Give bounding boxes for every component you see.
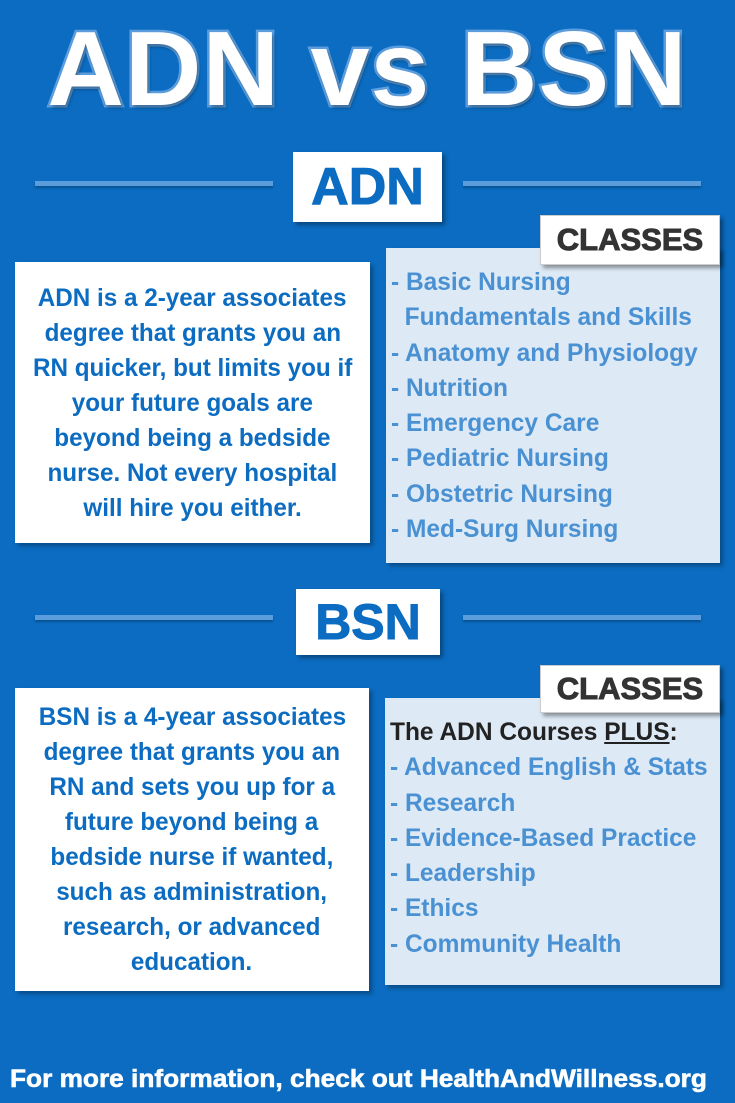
panel: BSN description: such as administration, bbox=[57, 878, 327, 906]
panel: ADN description: your future goals are bbox=[72, 389, 313, 417]
panel: BSN classes: - Community Health bbox=[390, 930, 621, 958]
panel: BSN classes: - Research bbox=[390, 789, 515, 817]
footer: For more information, check out HealthAndWillness.org bbox=[10, 1065, 707, 1093]
panel: ADN description: RN quicker, but limits you if bbox=[33, 354, 352, 382]
panel: BSN description: degree that grants you an bbox=[44, 738, 340, 766]
heading: CLASSES (BSN) bbox=[540, 665, 720, 713]
panel: BSN description: bedside nurse if wanted, bbox=[51, 843, 333, 871]
panel: ADN description: will hire you either. bbox=[83, 494, 302, 522]
heading: CLASSES (ADN): CLASSES bbox=[557, 222, 703, 257]
heading: ADN: ADN bbox=[311, 158, 424, 216]
panel: ADN description: beyond being a bedside bbox=[54, 424, 331, 452]
panel: ADN classes: - Obstetric Nursing bbox=[391, 480, 613, 508]
panel: ADN classes: Fundamentals and Skills bbox=[405, 303, 692, 331]
panel: ADN classes bbox=[386, 248, 720, 563]
heading: CLASSES (ADN) bbox=[540, 215, 720, 265]
panel: ADN description: ADN is a 2-year associates bbox=[38, 284, 347, 312]
panel: BSN classes bbox=[385, 698, 720, 985]
panel: BSN description: BSN is a 4-year associates bbox=[38, 703, 346, 731]
panel: BSN description: RN and sets you up for a bbox=[49, 773, 335, 801]
heading: CLASSES (BSN): CLASSES bbox=[557, 671, 703, 706]
panel: BSN classes: - Evidence-Based Practice bbox=[390, 824, 696, 852]
panel: ADN classes: - Pediatric Nursing bbox=[391, 444, 609, 472]
heading: ADN bbox=[293, 152, 442, 222]
panel: ADN description bbox=[15, 262, 370, 543]
panel: BSN description: research, or advanced bbox=[63, 913, 321, 941]
panel: ADN classes: - Nutrition bbox=[391, 374, 508, 402]
panel: ADN description: nurse. Not every hospital bbox=[48, 459, 337, 487]
panel: BSN classes: - Leadership bbox=[390, 859, 536, 887]
heading: BSN: BSN bbox=[315, 594, 421, 650]
panel: ADN classes: - Med-Surg Nursing bbox=[391, 515, 618, 543]
panel: ADN classes: - Anatomy and Physiology bbox=[391, 339, 698, 367]
panel: BSN description bbox=[15, 688, 369, 991]
panel: ADN classes: - Emergency Care bbox=[391, 409, 599, 437]
panel: ADN classes: - Basic Nursing bbox=[391, 268, 571, 296]
heading: BSN bbox=[296, 589, 440, 655]
panel: BSN classes: The ADN Courses PLUS: bbox=[390, 718, 678, 746]
panel: BSN description: future beyond being a bbox=[65, 808, 319, 836]
title: ADN vs BSN bbox=[47, 10, 688, 128]
panel: BSN classes: - Advanced English & Stats bbox=[390, 753, 708, 781]
panel: BSN classes: - Ethics bbox=[390, 894, 478, 922]
panel: ADN description: degree that grants you an bbox=[44, 319, 341, 347]
panel: BSN description: education. bbox=[131, 948, 253, 976]
